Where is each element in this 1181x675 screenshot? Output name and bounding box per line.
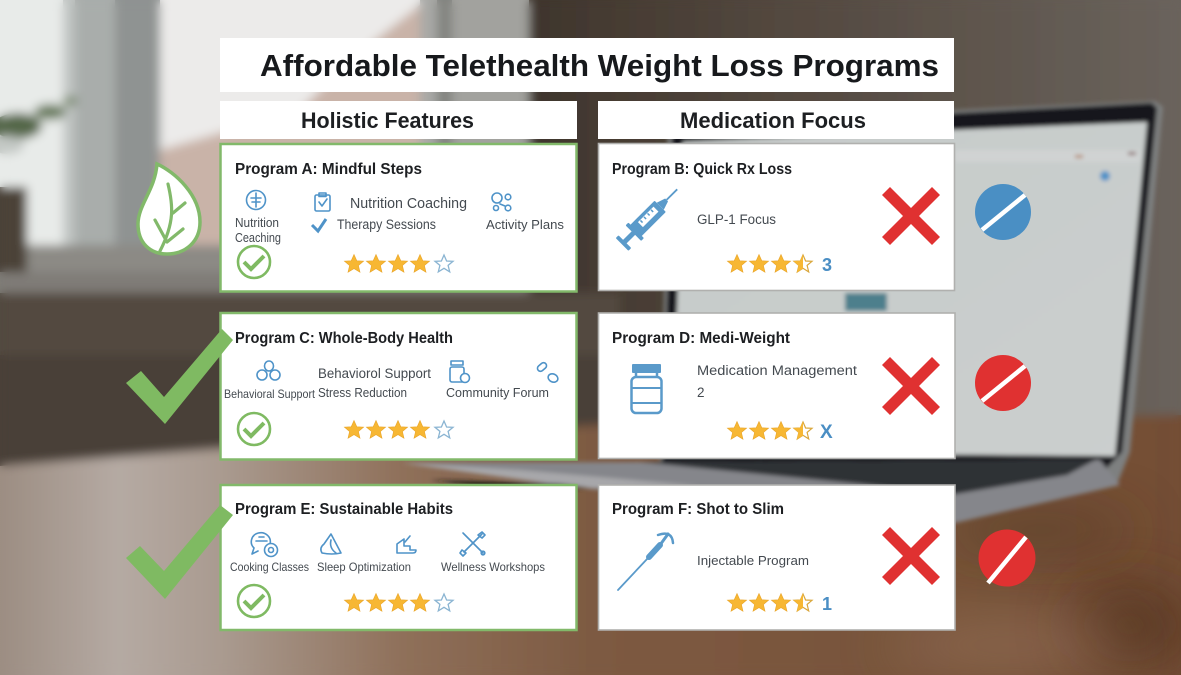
panel: program A: Activity Plans	[486, 217, 564, 232]
heading: medication focus: Medication Focus	[680, 108, 866, 133]
star rating	[344, 420, 453, 438]
panel: program A: Therapy Sessions	[337, 217, 436, 232]
panel: program E: Program E: Sustainable Habits	[235, 501, 453, 518]
heading: medication focus	[598, 101, 954, 139]
panel: program F: 1	[822, 594, 832, 614]
icon: red no-entry F	[978, 530, 1036, 586]
panel: program C: Stress Reduction	[318, 386, 407, 400]
panel: program D: X	[820, 422, 833, 443]
heading: holistic features: Holistic Features	[301, 108, 474, 133]
star rating	[727, 422, 812, 439]
icon: red cross	[882, 187, 940, 245]
icon: activity cluster	[492, 193, 511, 211]
icon: nutrition globe	[246, 190, 266, 210]
panel: program D	[598, 313, 955, 458]
icon: check mark	[312, 219, 326, 231]
icon: red cross	[882, 527, 940, 585]
panel: program C	[220, 313, 576, 460]
icon: crossed tools	[460, 532, 485, 556]
panel: program F: Program F: Shot to Slim	[612, 501, 784, 518]
panel: program C: Community Forum	[446, 385, 549, 400]
icon: approved circle	[238, 413, 270, 445]
panel: program E: Sleep Optimization	[317, 560, 411, 574]
panel: program C: Program C: Whole-Body Health	[235, 330, 453, 347]
icon: people	[257, 361, 280, 380]
panel: program E: Wellness Workshops	[441, 560, 545, 574]
panel: program D: Program D: Medi-Weight	[612, 330, 791, 347]
panel: program E	[220, 485, 576, 630]
panel: program A	[220, 144, 576, 292]
panel: program E: Cooking Classes	[230, 560, 309, 574]
icon: sleep	[321, 534, 341, 554]
panel: program A: Nutrition Coaching	[350, 196, 467, 212]
panel: program D: Medication Management	[697, 363, 857, 378]
panel: program C: Behavioral Support	[224, 387, 316, 401]
icon: red no-entry D	[975, 355, 1031, 411]
panel: program C: Behaviorol Support	[318, 366, 431, 381]
star rating	[727, 254, 812, 272]
icon: pills	[536, 361, 559, 384]
icon: large check E	[126, 505, 233, 599]
title: Affordable Telethealth Weight Loss Programs	[260, 48, 939, 83]
panel: program A: Ceaching	[235, 231, 281, 245]
icon: syringe	[614, 182, 685, 252]
icon: approved circle	[238, 585, 270, 617]
icon: supplement bottle	[450, 361, 470, 382]
panel: program B: 3	[822, 255, 832, 275]
panel: program B	[598, 144, 954, 290]
icon: cooking chat	[251, 533, 278, 556]
icon: injector pen	[618, 534, 673, 590]
icon: blue no-entry B	[975, 184, 1031, 240]
icon: red cross	[882, 357, 940, 415]
icon: leaf	[138, 164, 200, 254]
icon: approved circle	[238, 246, 270, 278]
star rating	[344, 594, 453, 611]
panel: program A: Nutrition	[235, 216, 279, 230]
icon: clipboard	[315, 193, 330, 211]
panel: program D: 2	[697, 385, 705, 400]
panel: program F: Injectable Program	[697, 553, 809, 568]
panel: program A: Program A: Mindful Steps	[235, 161, 422, 178]
icon: exercise	[397, 536, 416, 553]
star rating	[344, 254, 453, 272]
star rating	[727, 594, 812, 611]
heading: holistic features	[220, 101, 577, 139]
panel: program F	[598, 485, 955, 630]
icon: large check C	[126, 329, 233, 424]
panel: program B: Program B: Quick Rx Loss	[612, 161, 792, 178]
title	[220, 38, 954, 92]
panel: program B: GLP-1 Focus	[697, 212, 776, 227]
icon: medicine bottle	[632, 364, 662, 413]
